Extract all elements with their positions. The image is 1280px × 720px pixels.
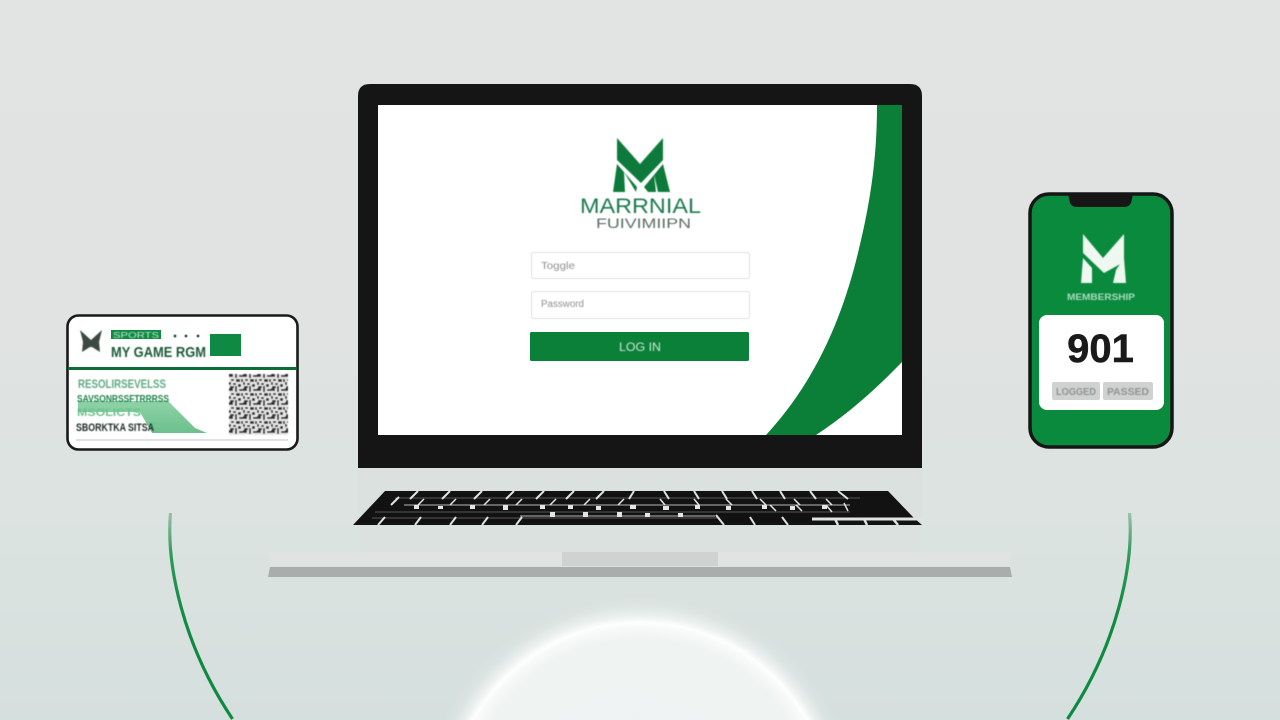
keyboard xyxy=(353,491,922,525)
card details text: RESOLIRSEVELSS xyxy=(78,377,166,391)
laptop deck xyxy=(358,468,922,552)
card emblem xyxy=(80,330,102,352)
screen logo mark xyxy=(613,138,670,192)
card dots xyxy=(174,334,200,338)
laptop xyxy=(268,84,1012,577)
green screen swoosh xyxy=(766,105,902,435)
card title: MY GAME RGM xyxy=(111,344,206,361)
phone number card xyxy=(1039,315,1164,410)
left green arc xyxy=(170,513,232,719)
card green wedge xyxy=(78,401,207,433)
phone chip left: LOGGED xyxy=(1056,387,1096,398)
card photo block xyxy=(210,334,241,356)
username field xyxy=(532,252,750,278)
password field: Password xyxy=(541,299,584,310)
phone chip right: PASSED xyxy=(1107,387,1149,398)
laptop bezel xyxy=(358,84,922,468)
laptop base front xyxy=(268,552,1012,577)
right green arc xyxy=(1068,513,1130,719)
card details text: SBORKTKA SITSA xyxy=(76,422,154,434)
phone notch xyxy=(1068,194,1133,207)
login button xyxy=(530,332,749,361)
smartphone xyxy=(1030,194,1172,447)
brand subtitle: FUIVIMIIPN xyxy=(596,215,691,231)
card details text xyxy=(76,377,169,434)
username field: Toggle xyxy=(541,261,576,272)
brand name: MARRNIAL xyxy=(580,195,701,218)
laptop screen xyxy=(378,105,902,435)
card header label xyxy=(111,330,161,340)
member number: 901 xyxy=(1067,327,1134,371)
card details text: SAVSONRSSFTRRRSS xyxy=(77,394,169,405)
card header label: SPORTS xyxy=(113,331,159,340)
card divider xyxy=(68,367,297,370)
card QR code xyxy=(229,374,288,435)
ID card xyxy=(68,316,298,450)
password field xyxy=(532,292,750,318)
card bottom line xyxy=(76,439,288,441)
phone body xyxy=(1030,194,1172,447)
glow arc at bottom xyxy=(420,595,860,720)
phone caption: MEMBERSHIP xyxy=(1067,292,1135,302)
card details text: MSOLICTS xyxy=(77,407,141,419)
login button: LOG IN xyxy=(619,340,661,354)
phone logo mark xyxy=(1081,234,1126,283)
